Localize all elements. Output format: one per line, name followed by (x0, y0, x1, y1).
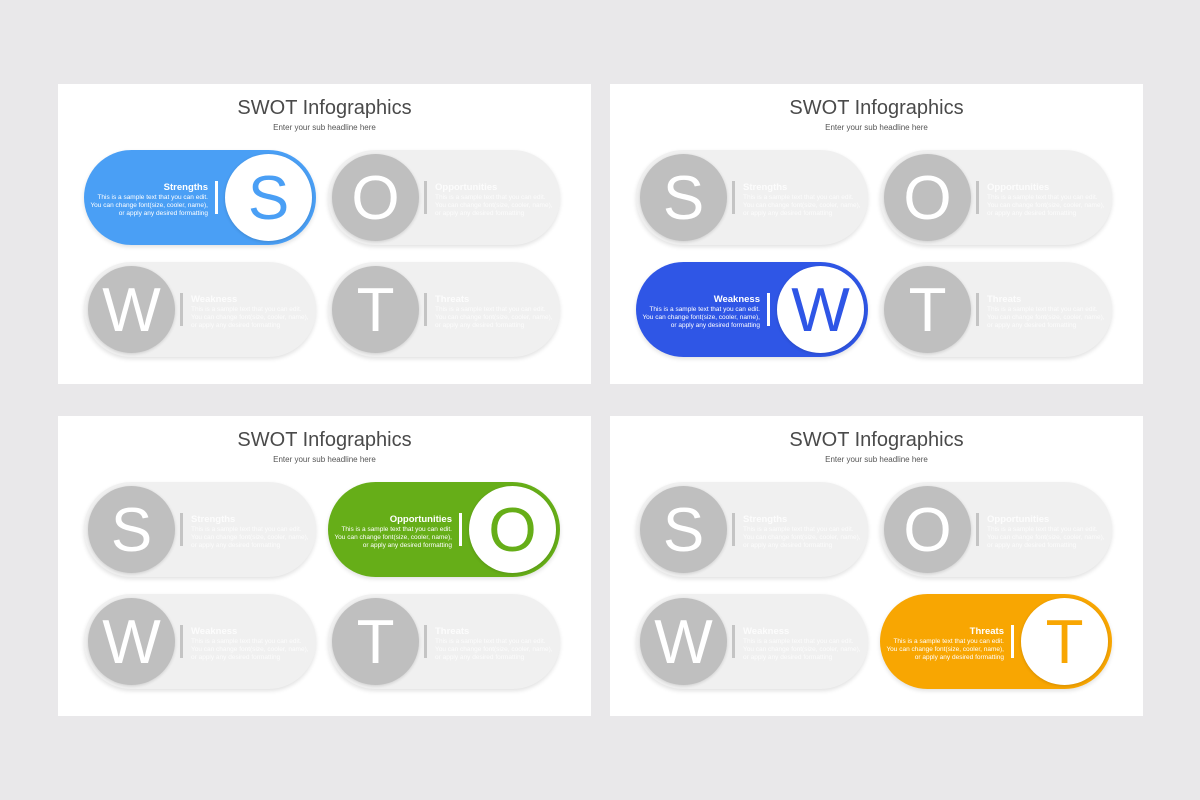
pill: strengths (636, 150, 868, 245)
pill: opportunities active: or apply any desired formatting (363, 542, 452, 549)
subtitle: Enter your sub headline here (273, 455, 376, 464)
pill: strengths: or apply any desired formatting (743, 542, 832, 549)
pill: weakness active: Weakness (714, 294, 760, 305)
pill: threats active: Threats (970, 626, 1004, 637)
slide 3: opportunities (58, 416, 591, 716)
pill: opportunities: This is a sample text that you can edit. (987, 526, 1098, 533)
slide 4: threats (610, 416, 1143, 716)
pill: opportunities: O (903, 496, 952, 565)
pill: opportunities: or apply any desired formatting (435, 210, 524, 217)
subtitle: Enter your sub headline here (825, 123, 928, 132)
pill: weakness: Weakness (191, 294, 237, 305)
pill: threats: Threats (435, 626, 469, 637)
pill: strengths active (84, 150, 316, 245)
pill: weakness (84, 262, 316, 357)
pill: weakness: You can change font(size, cooler, name), (191, 314, 309, 321)
pill: opportunities active: You can change font(size, cooler, name), (334, 534, 452, 541)
pill: threats: This is a sample text that you can edit. (435, 306, 546, 313)
pill: threats: You can change font(size, cooler, name), (987, 314, 1105, 321)
pill: strengths active: S (248, 164, 289, 233)
pill: threats: You can change font(size, cooler, name), (435, 646, 553, 653)
pill: strengths: S (111, 496, 152, 565)
pill: threats: or apply any desired formatting (435, 654, 524, 661)
pill: strengths active: or apply any desired formatting (119, 210, 208, 217)
pill: strengths: or apply any desired formatting (191, 542, 280, 549)
pill: weakness: Weakness (743, 626, 789, 637)
pill: strengths: or apply any desired formatting (743, 210, 832, 217)
pill: weakness: This is a sample text that you can edit. (191, 306, 302, 313)
pill: weakness active: You can change font(size, cooler, name), (642, 314, 760, 321)
pill: weakness (84, 594, 316, 689)
pill: threats: You can change font(size, cooler, name), (435, 314, 553, 321)
pill: weakness active: This is a sample text that you can edit. (649, 306, 760, 313)
pill: threats: T (909, 276, 946, 345)
subtitle: Enter your sub headline here (825, 455, 928, 464)
pill: weakness active: W (791, 276, 850, 345)
pill: opportunities: You can change font(size, cooler, name), (987, 534, 1105, 541)
pill: weakness: or apply any desired formatting (191, 654, 280, 661)
pill: opportunities (880, 150, 1112, 245)
subtitle: Enter your sub headline here (273, 123, 376, 132)
pill: strengths: Strengths (743, 182, 787, 193)
pill: opportunities (880, 482, 1112, 577)
pill: weakness: or apply any desired formatting (743, 654, 832, 661)
pill: threats: This is a sample text that you can edit. (987, 306, 1098, 313)
pill: weakness: You can change font(size, cooler, name), (191, 646, 309, 653)
pill: weakness: This is a sample text that you can edit. (743, 638, 854, 645)
pill: weakness (636, 594, 868, 689)
pill: threats: Threats (987, 294, 1021, 305)
pill: opportunities active: This is a sample text that you can edit. (341, 526, 452, 533)
pill: opportunities: O (351, 164, 400, 233)
pill: opportunities active (328, 482, 560, 577)
pill: strengths: Strengths (743, 514, 787, 525)
pill: opportunities: O (903, 164, 952, 233)
pill: strengths active: Strengths (164, 182, 208, 193)
pill: threats active: You can change font(size, cooler, name), (886, 646, 1004, 653)
pill: threats active: This is a sample text that you can edit. (893, 638, 1004, 645)
pill: threats: T (357, 276, 394, 345)
pill: threats active: T (1046, 608, 1083, 677)
pill: strengths: You can change font(size, cooler, name), (743, 534, 861, 541)
pill: opportunities: You can change font(size, cooler, name), (987, 202, 1105, 209)
pill: strengths (636, 482, 868, 577)
pill: opportunities: This is a sample text that you can edit. (435, 194, 546, 201)
slide 1: strengths (58, 84, 591, 384)
pill: opportunities: Opportunities (987, 514, 1049, 525)
pill: threats: This is a sample text that you can edit. (435, 638, 546, 645)
pill: threats active: or apply any desired formatting (915, 654, 1004, 661)
pill: weakness: You can change font(size, cooler, name), (743, 646, 861, 653)
pill: weakness active (636, 262, 868, 357)
pill: strengths: Strengths (191, 514, 235, 525)
pill: strengths: This is a sample text that you can edit. (743, 526, 854, 533)
pill: strengths: You can change font(size, cooler, name), (743, 202, 861, 209)
slide 2: weakness (610, 84, 1143, 384)
title: SWOT Infographics (237, 97, 412, 119)
pill: strengths: S (663, 496, 704, 565)
pill: threats active (880, 594, 1112, 689)
pill: weakness: or apply any desired formatting (191, 322, 280, 329)
pill: threats (880, 262, 1112, 357)
pill: opportunities: This is a sample text that you can edit. (987, 194, 1098, 201)
pill: strengths: This is a sample text that you can edit. (191, 526, 302, 533)
pill: strengths: You can change font(size, cooler, name), (191, 534, 309, 541)
title: SWOT Infographics (789, 97, 964, 119)
pill: weakness active: or apply any desired formatting (671, 322, 760, 329)
pill: threats (328, 262, 560, 357)
pill: opportunities: Opportunities (435, 182, 497, 193)
pill: opportunities: Opportunities (987, 182, 1049, 193)
pill: strengths active: This is a sample text that you can edit. (97, 194, 208, 201)
title: SWOT Infographics (237, 429, 412, 451)
pill: opportunities (328, 150, 560, 245)
pill: threats (328, 594, 560, 689)
pill: opportunities active: Opportunities (390, 514, 452, 525)
pill: strengths: S (663, 164, 704, 233)
pill: weakness: This is a sample text that you can edit. (191, 638, 302, 645)
pill: weakness: W (102, 608, 161, 677)
title: SWOT Infographics (789, 429, 964, 451)
pill: strengths active: You can change font(size, cooler, name), (90, 202, 208, 209)
pill: opportunities active: O (488, 496, 537, 565)
pill: opportunities: You can change font(size, cooler, name), (435, 202, 553, 209)
pill: weakness: W (654, 608, 713, 677)
pill: threats: or apply any desired formatting (987, 322, 1076, 329)
pill: opportunities: or apply any desired formatting (987, 210, 1076, 217)
pill: opportunities: or apply any desired formatting (987, 542, 1076, 549)
pill: threats: or apply any desired formatting (435, 322, 524, 329)
pill: weakness: Weakness (191, 626, 237, 637)
pill: strengths (84, 482, 316, 577)
pill: strengths: This is a sample text that you can edit. (743, 194, 854, 201)
pill: weakness: W (102, 276, 161, 345)
pill: threats: T (357, 608, 394, 677)
pill: threats: Threats (435, 294, 469, 305)
